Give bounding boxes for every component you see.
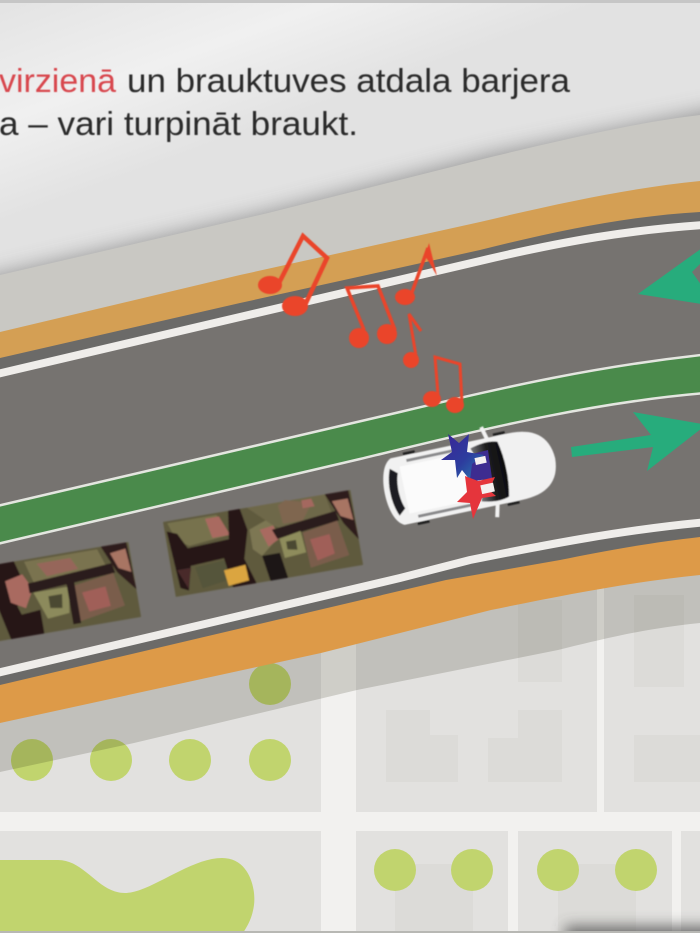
music notes <box>258 236 464 413</box>
rear window <box>385 467 407 517</box>
green park blob <box>0 858 254 933</box>
note: flagged upper <box>395 243 437 305</box>
purple light bar glow <box>468 450 492 482</box>
upper sidewalk <box>0 115 700 450</box>
military vehicle rear <box>0 542 141 649</box>
orange verge lower <box>0 450 700 723</box>
roof <box>399 450 488 514</box>
green median <box>0 353 700 548</box>
background <box>0 0 700 560</box>
caption line 1: un brauktuves atdala barjera <box>127 62 571 99</box>
red police light star <box>457 476 496 519</box>
caption text <box>0 62 571 142</box>
ground: city blocks <box>0 560 700 933</box>
streets <box>0 560 700 933</box>
mirrors <box>476 425 506 518</box>
side windows <box>406 447 477 518</box>
arrow: oncoming direction <box>638 248 700 304</box>
note: flagged lower <box>403 314 421 368</box>
buildings <box>386 595 700 933</box>
caption line 2: a – vari turpināt braukt. <box>0 105 358 142</box>
wheels <box>403 431 520 525</box>
note: small beamed pair <box>423 357 464 413</box>
note: large beamed pair <box>258 236 327 316</box>
body <box>378 425 562 528</box>
car light highlights <box>474 456 495 494</box>
lower edge line <box>0 521 700 677</box>
lower sidewalk <box>0 450 700 772</box>
note: middle beamed pair <box>347 286 397 348</box>
military vehicle front <box>163 489 363 597</box>
arrow: travel direction <box>571 412 700 471</box>
white car <box>375 413 565 540</box>
orange verge upper <box>0 181 700 450</box>
road shadow on background <box>0 105 700 360</box>
bottom shadow blotch <box>565 926 700 933</box>
caption line 1: virzienā <box>0 62 117 99</box>
upper edge line <box>0 224 700 378</box>
tree dots <box>11 663 657 891</box>
asphalt <box>0 212 700 685</box>
blue police light star <box>441 434 484 480</box>
windscreen <box>470 439 512 504</box>
